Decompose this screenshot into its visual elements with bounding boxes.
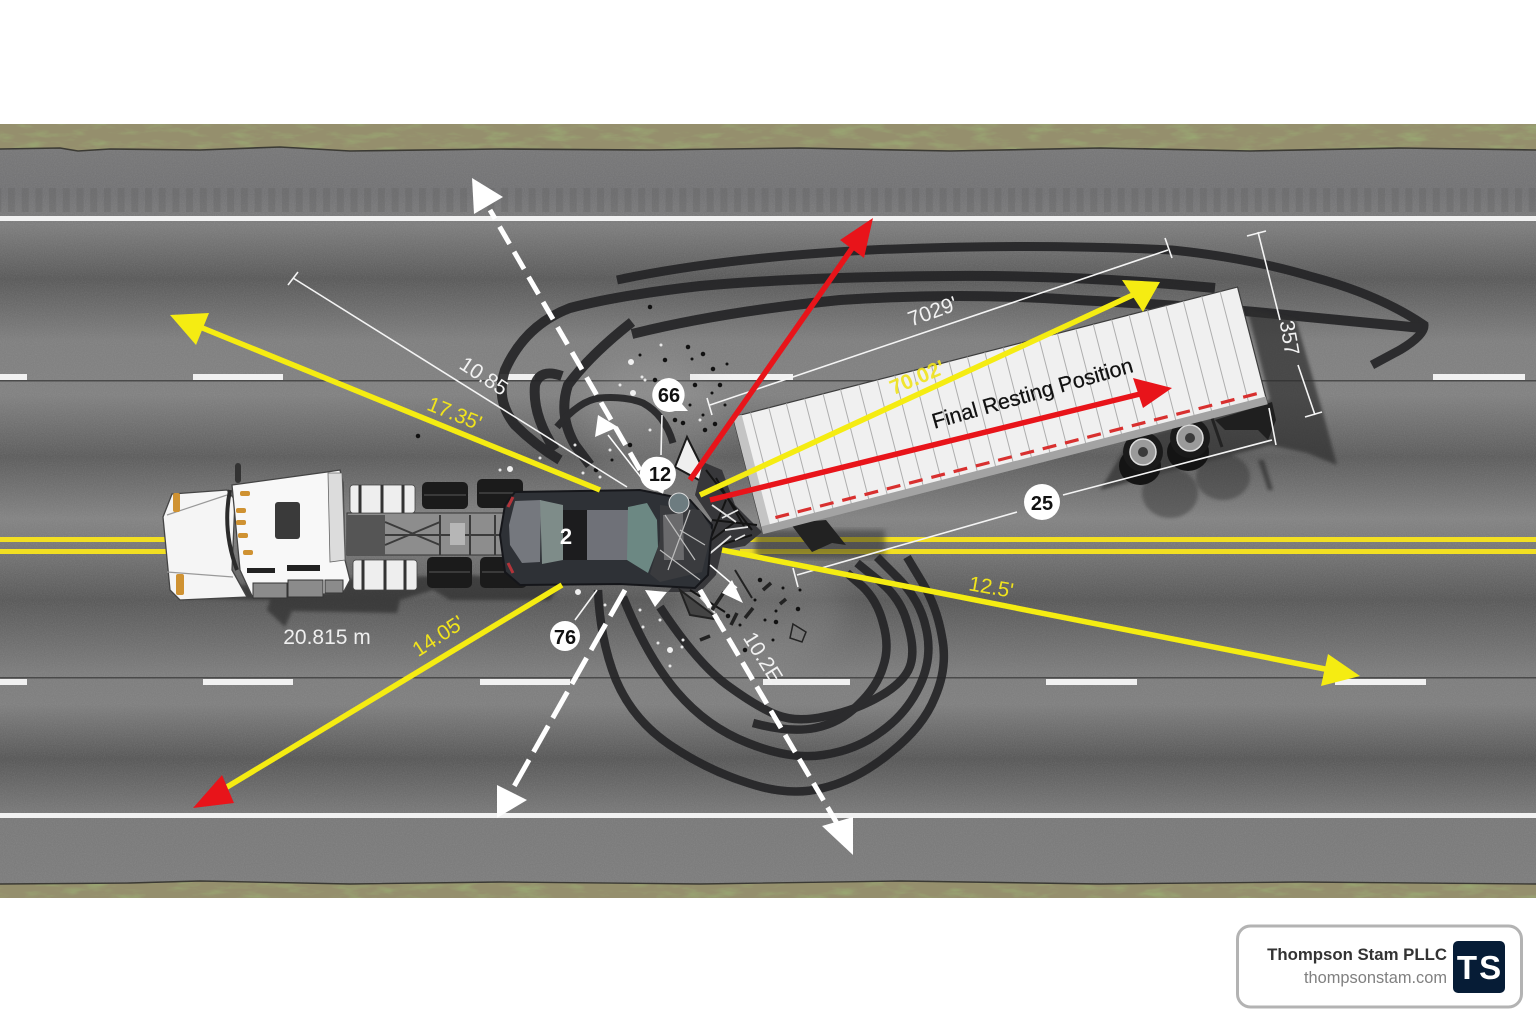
- truck tractor: [163, 463, 527, 600]
- trailer roof: [733, 287, 1267, 530]
- roof window: [275, 502, 300, 539]
- label 10.2: 10.2E: [738, 628, 787, 687]
- rear window: [540, 500, 563, 564]
- short impact arrows: [595, 415, 743, 607]
- callout 76: 76: [554, 627, 576, 649]
- callout 66: [652, 378, 688, 412]
- amber cab lights: [173, 491, 253, 595]
- arrow: lower right trajectory: [700, 590, 853, 855]
- exhaust stack: [235, 463, 241, 483]
- label 7029: 7029': [905, 292, 961, 331]
- label 12.5: 12.5': [967, 572, 1015, 603]
- arrow: yellow lower left with red head: [193, 585, 562, 808]
- dashed lane lines: [0, 374, 1536, 685]
- firm branding badge: [1238, 926, 1522, 1007]
- lower skid marks: [598, 557, 944, 792]
- roof panel: [587, 510, 629, 560]
- label truck length: 20.815 m: [283, 626, 371, 649]
- debris dots: [418, 307, 800, 666]
- logo square: TS: [1457, 949, 1503, 986]
- fuel tanks: [350, 485, 417, 590]
- upper skid marks: [502, 246, 1424, 465]
- tail lights: [508, 497, 513, 573]
- white dimension lines: [288, 231, 1322, 620]
- firm name: Thompson Stam PLLC: [1267, 945, 1447, 964]
- dimension: trailer width: [1247, 231, 1322, 417]
- lower grass verge: [0, 881, 1536, 898]
- crash wreckage under car: [668, 437, 762, 613]
- callout 12: [640, 457, 676, 494]
- car number: 2: [560, 524, 572, 549]
- callout leader lines: [575, 415, 662, 620]
- rumble strip: [0, 188, 1536, 212]
- trailer shadow: [1100, 308, 1337, 518]
- truck shadow: [187, 575, 560, 627]
- car body: [500, 490, 712, 588]
- dimension: lower trailer length: [793, 408, 1276, 587]
- road surface: [0, 124, 1536, 898]
- arrow: yellow lower right: [722, 550, 1360, 686]
- double yellow centre line: [0, 537, 1536, 554]
- dimension: left diagonal: [288, 272, 627, 487]
- callout 12: 12: [649, 464, 671, 486]
- lightened pavement around impact: [580, 360, 845, 665]
- callout 25: 25: [1031, 493, 1053, 515]
- logo square: [1453, 941, 1505, 993]
- dashed white trajectory arrows: [472, 178, 853, 855]
- solid white edge lines: [0, 216, 1536, 818]
- windshield: [627, 503, 658, 573]
- arrow: yellow upper left: [170, 313, 600, 490]
- bottom rail: [761, 397, 1268, 534]
- crashed car: [500, 490, 712, 588]
- callout 76: [550, 621, 580, 651]
- dimension: upper trailer length: [707, 238, 1172, 415]
- label 17.35: 17.35': [424, 393, 485, 435]
- measurement labels: [283, 292, 1303, 687]
- callout 66: 66: [658, 385, 680, 407]
- roof ribs: [750, 292, 1249, 526]
- sunroof: [563, 510, 588, 560]
- tire skid marks: [502, 246, 1424, 792]
- firm website: thompsonstam.com: [1304, 969, 1447, 987]
- upper grass verge: [0, 124, 1536, 151]
- yellow trajectory arrows: [170, 280, 1360, 808]
- numbered callouts: [550, 378, 1060, 651]
- cab: [232, 470, 350, 598]
- arrow: lower left trajectory: [497, 590, 625, 818]
- label 70.02: 70.02': [886, 356, 948, 400]
- scattered debris shapes: [680, 570, 806, 642]
- badge frame: [1238, 926, 1522, 1007]
- arrow: red trailer axis: [710, 378, 1172, 500]
- hood: [163, 490, 247, 600]
- chassis: [347, 513, 505, 555]
- trailer wheels: [1119, 402, 1276, 485]
- red trajectory arrows: [690, 218, 1172, 500]
- callout 25: [1024, 484, 1060, 520]
- label 10.85: 10.85: [455, 353, 512, 401]
- arrow: upper left trajectory: [472, 178, 640, 470]
- rear deck: [509, 500, 541, 563]
- dimmed centre line under trailer: [755, 520, 885, 558]
- front panel: [733, 415, 771, 530]
- label 357: 357: [1275, 319, 1303, 357]
- label 14.05: 14.05': [408, 612, 468, 662]
- trailer: [733, 285, 1296, 612]
- trailer label: Final Resting Position: [929, 354, 1136, 434]
- rear tires: [422, 479, 527, 588]
- red reflective dashes: [775, 392, 1264, 518]
- arrow: red upward: [690, 218, 873, 480]
- arrow: yellow upper right: [700, 280, 1160, 495]
- crumpled hood: [650, 505, 712, 582]
- cab steps: [247, 565, 343, 598]
